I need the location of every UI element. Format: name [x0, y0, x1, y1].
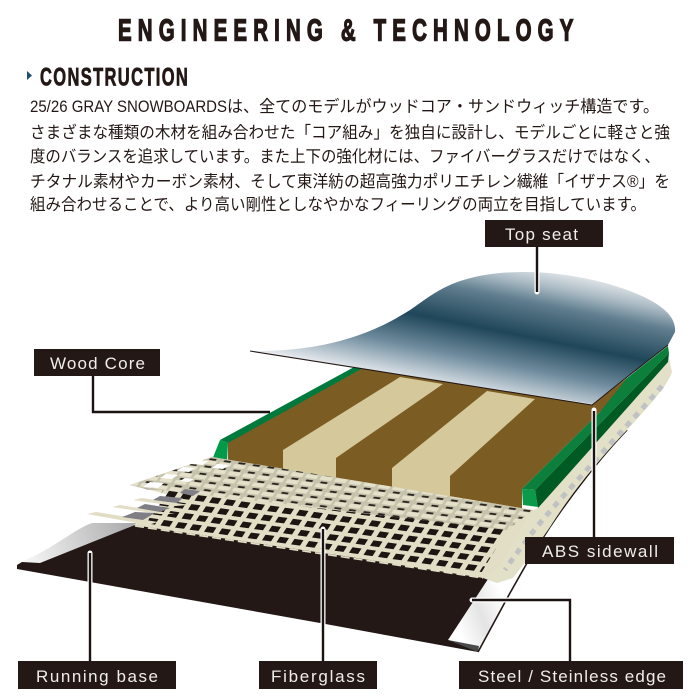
- label: Top seat: Top seat: [505, 225, 578, 244]
- label: Steel / Steinless edge: [459, 661, 683, 689]
- label: ABS sidewall: [525, 537, 674, 564]
- wood core: [228, 368, 632, 515]
- label: Running base: [18, 661, 176, 689]
- text block: description: さまざまな種類の木材を組み合わせた「コア組み」を独自に設計し、モデルごとに軽さと強: [30, 123, 671, 142]
- fiberglass: serrated lower edge: [135, 526, 483, 578]
- ABS sidewall: right: [522, 346, 669, 508]
- label: Running base: Running base: [36, 667, 158, 686]
- label: Fiberglass: [259, 661, 377, 689]
- fiberglass: [87, 457, 560, 578]
- fiberglass: see-through steel panels: [122, 489, 200, 520]
- text block: description: チタナル素材やカーボン素材、そして東洋紡の超高強力ポリエチレン繊維「イザナス®」を: [30, 173, 670, 191]
- top seat lower edge: [250, 345, 668, 405]
- text block: description: 度のバランスを追求しています。また上下の強化材には、ファイバーグラスだけではなく、: [30, 148, 660, 166]
- snowboard layers diagram: [17, 272, 675, 652]
- ABS sidewall underlay strip: [483, 358, 672, 583]
- fiberglass: open white cells: [143, 460, 229, 488]
- text block: description: [30, 97, 671, 214]
- steel edge: left: [17, 523, 136, 563]
- fiberglass: protruding strands: [87, 498, 190, 525]
- leader lines: [90, 247, 594, 661]
- label: Wood Core: Wood Core: [50, 354, 145, 373]
- running base: [17, 525, 490, 652]
- top seat sheet: [250, 272, 675, 404]
- label: Wood Core: [34, 349, 160, 376]
- fiberglass: coarse lower grid: [148, 490, 504, 572]
- title: ENGINEERING & TECHNOLOGY: [118, 12, 574, 47]
- label: Top seat: [485, 220, 603, 247]
- text block: description: 組み合わせることで、より高い剛性としなやかなフィーリングの両立を目指しています。: [30, 196, 646, 214]
- section heading: construction: CONSTRUCTION: [40, 64, 188, 91]
- steel edge: right: [448, 430, 627, 652]
- text block: description: 25/26 GRAY SNOWBOARDS: [30, 98, 227, 116]
- ABS sidewall: left: [212, 366, 363, 462]
- label: Steel / Steinless edge: Steel / Steinless edge: [478, 667, 666, 686]
- icon: section arrow: [27, 71, 32, 80]
- fiberglass: fine upper grid: [130, 457, 533, 530]
- label: Fiberglass: Fiberglass: [271, 667, 365, 686]
- core: light strips: [283, 377, 443, 500]
- label: ABS sidewall: ABS sidewall: [542, 542, 658, 561]
- text block: description: は、全てのモデルがウッドコア・サンドウィッチ構造です。: [227, 97, 659, 116]
